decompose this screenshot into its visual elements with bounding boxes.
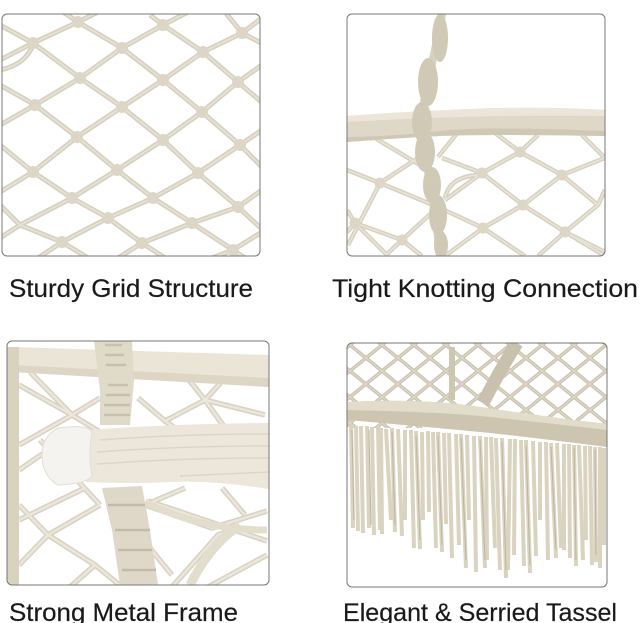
- panel: strong metal frame photo: [7, 341, 269, 587]
- seat band: [347, 401, 607, 447]
- frame tube: [347, 108, 605, 142]
- wrapped tube: [86, 423, 269, 489]
- lower rope: [102, 486, 158, 585]
- panel: sturdy grid structure photo: [0, 10, 265, 258]
- left edge rope: [7, 347, 19, 585]
- braided rope: [421, 14, 442, 256]
- top frame tube: [12, 347, 269, 387]
- thick strand cluster: [145, 502, 267, 530]
- panel: tight knotting connection photo: [347, 14, 605, 259]
- upper rope: [94, 341, 134, 425]
- panel: elegant serried tassel photo: [347, 343, 607, 587]
- caption: tight knotting connection: Tight Knotting Connection: [332, 275, 638, 303]
- tassel fringe: [351, 425, 604, 578]
- caption: sturdy grid structure: Sturdy Grid Structure: [9, 275, 253, 303]
- icon: white end cap: [42, 427, 92, 485]
